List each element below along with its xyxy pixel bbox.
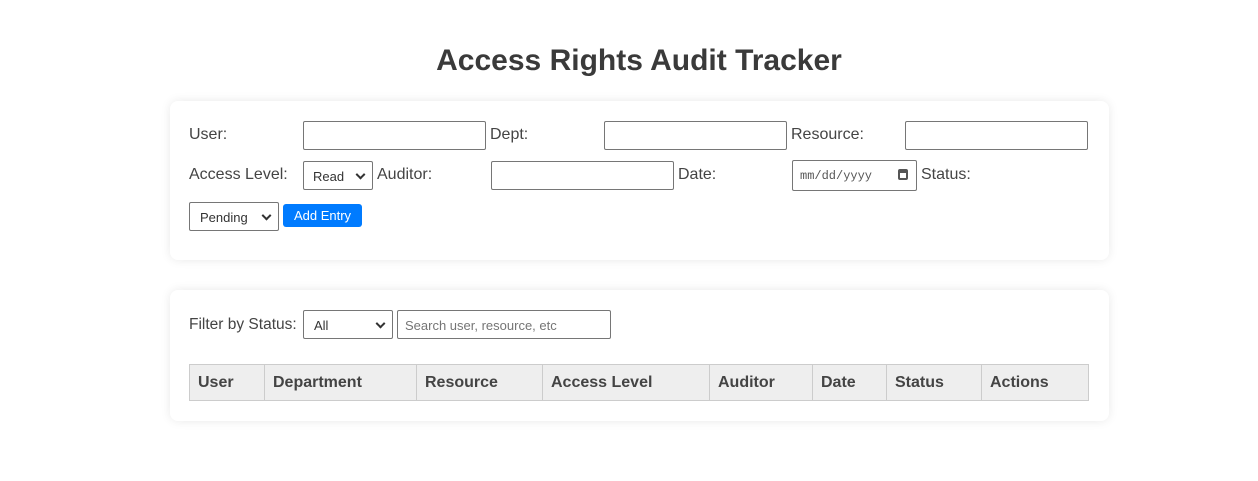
table: User	[198, 374, 234, 390]
table: Resource	[425, 374, 498, 390]
input: resource	[905, 121, 1088, 150]
input: date: mm/dd/yyyy	[800, 169, 872, 183]
table: Actions	[990, 374, 1049, 390]
label: access level: Access Level:	[189, 166, 288, 183]
button: add entry: Add Entry	[294, 208, 351, 223]
label: auditor: Auditor:	[377, 166, 432, 183]
label: filter: Filter by Status:	[189, 316, 297, 333]
label: dept: Dept:	[490, 126, 528, 143]
panel: records	[170, 290, 1109, 421]
input: search: Search user, resource, etc	[405, 318, 557, 333]
select: status: Pending	[200, 210, 248, 225]
select: filter	[303, 310, 393, 339]
table: Auditor	[718, 374, 775, 390]
table: Date	[821, 374, 856, 390]
select: status	[189, 202, 279, 231]
table: Status	[895, 374, 944, 390]
label: status: Status:	[921, 166, 971, 183]
select: access level: Read	[313, 169, 344, 184]
input: search	[397, 310, 611, 339]
button: add entry	[283, 204, 362, 227]
table: Department	[273, 374, 362, 390]
label: date: Date:	[678, 166, 716, 183]
panel: entry form	[170, 101, 1109, 260]
input: auditor	[491, 161, 674, 190]
label: resource: Resource:	[791, 126, 864, 143]
table	[189, 364, 1089, 401]
title: Access Rights Audit Tracker	[436, 44, 842, 77]
input: date	[792, 160, 917, 191]
input: user	[303, 121, 486, 150]
table: Access Level	[551, 374, 652, 390]
input: dept	[604, 121, 787, 150]
select: access level	[303, 161, 373, 190]
select: filter: All	[314, 318, 328, 333]
label: user: User:	[189, 126, 227, 143]
